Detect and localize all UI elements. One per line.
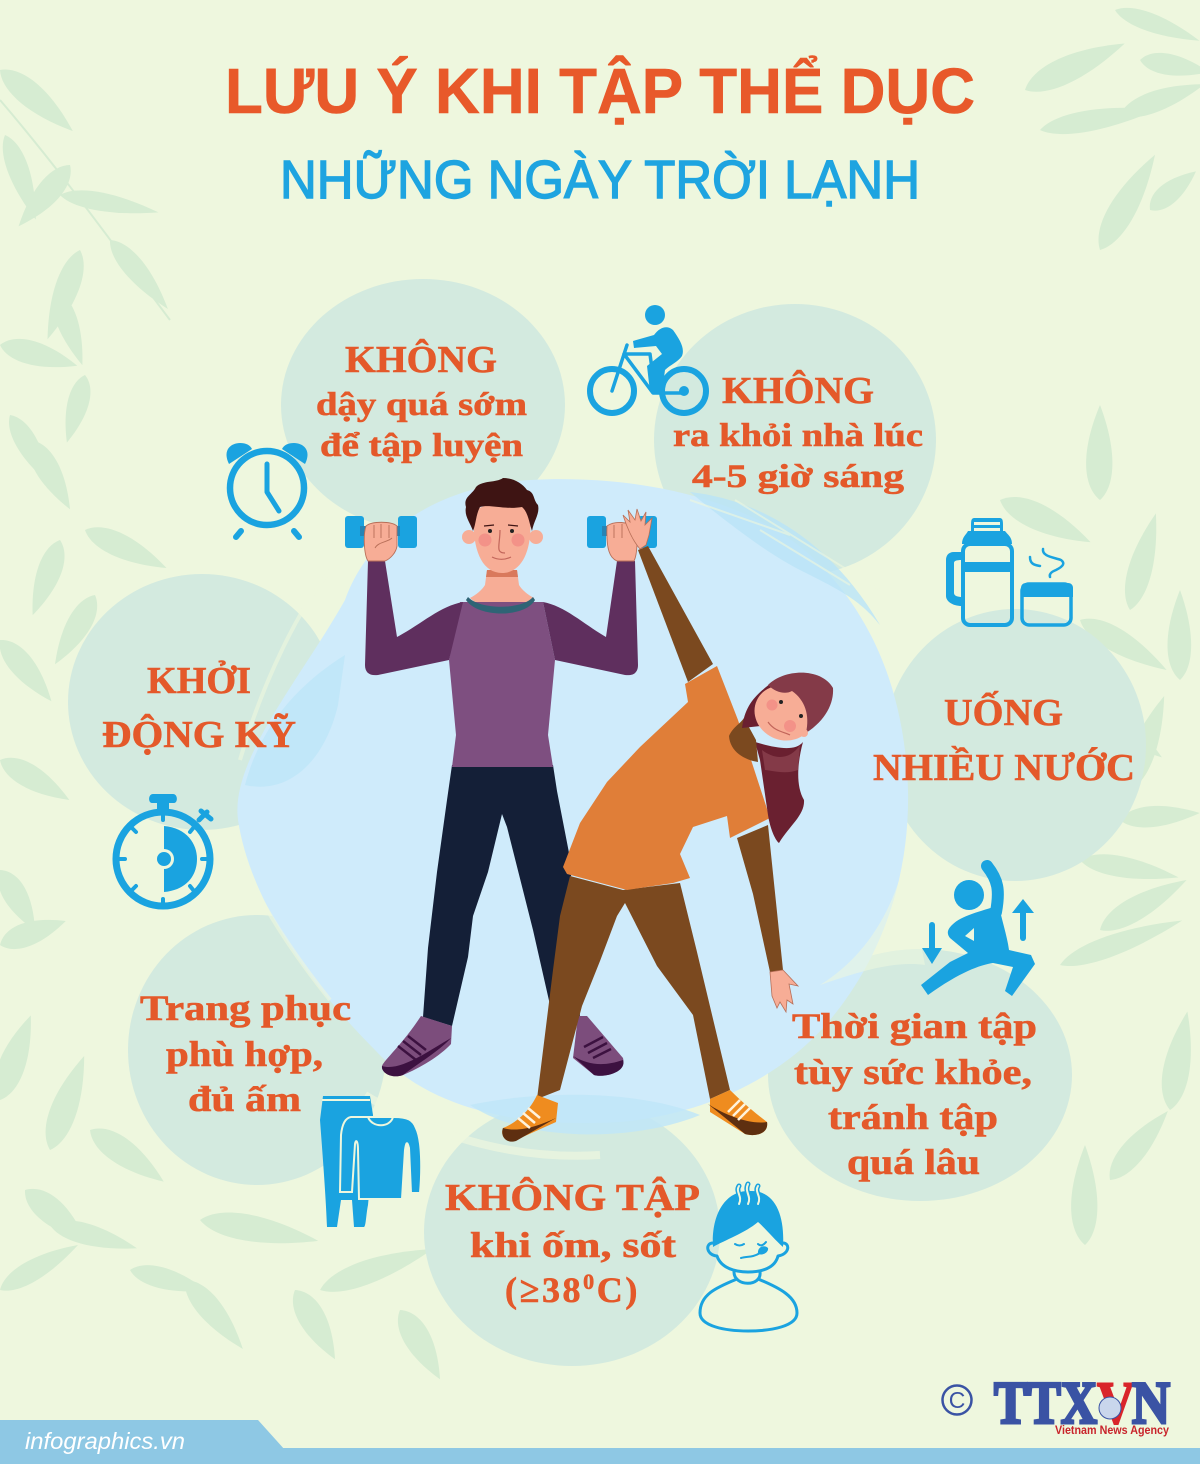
icon: alarm clock [226,443,308,537]
tip: do not exercise when sick [445,1176,700,1310]
icon: stretching person [921,866,1035,996]
woman's shoes [502,1090,767,1142]
logo: TTXVN [942,1370,1170,1437]
footer tab: website: infographics.vn [25,1428,185,1454]
dumbbells [345,516,657,548]
tip: do not leave home at 4-5 am [673,369,923,495]
decorative leaves: bottom left [0,1011,452,1385]
central blue circle [230,479,925,1156]
man's neck and head [462,478,543,608]
logo: TTXVN: TTX [994,1370,1097,1436]
tip: do not exercise when sick: C) [597,1270,640,1310]
tip: do not get up too early: KHÔNG [345,338,497,381]
subtitle: NHỮNG NGÀY TRỜI LẠNH [280,150,920,210]
tip: exercise time according to health: tránh tập [828,1097,998,1137]
tip: suitable warm clothes: Trang phục [140,988,351,1028]
tip: warm up thoroughly: ĐỘNG KỸ [102,713,296,756]
decorative leaves: top left [0,60,176,489]
tip: do not exercise when sick: KHÔNG TẬP [445,1176,700,1219]
decorative leaves: left middle [0,434,172,955]
tip: suitable warm clothes: phù hợp, [166,1034,323,1074]
icon: thermal clothing [320,1096,421,1227]
logo: TTXVN: C [949,1387,965,1413]
tip: do not exercise when sick: (≥38 [505,1270,583,1310]
logo: TTXVN: Vietnam News Agency [1055,1425,1170,1437]
tip: exercise time according to health: Thời gian tập [792,1006,1037,1046]
decorative leaves: right side [995,405,1200,1245]
tip: do not leave home at 4-5 am: KHÔNG [722,369,874,412]
icon: cyclist [590,305,706,413]
background blobs [68,279,1146,1366]
tip: exercise time according to health: quá lâu [847,1142,980,1182]
tip: exercise time according to health: tùy sức khỏe, [794,1052,1032,1092]
tip: suitable warm clothes: đủ ấm [188,1079,301,1119]
man's shirt [365,561,638,767]
tip: suitable warm clothes [140,988,351,1119]
tip: drink plenty of water: UỐNG [944,690,1063,734]
icon: stopwatch [116,794,211,906]
tip: warm up thoroughly: KHỞI [147,660,251,702]
logo: TTXVN: V [1097,1370,1135,1436]
logo: TTXVN: N [1132,1370,1170,1436]
woman's raised arm and hand [623,509,713,682]
decorative leaves: top right [1019,1,1200,256]
woman's hair, scarf and face [729,673,833,843]
man's trousers [423,765,580,1026]
tip: do not exercise when sick: 0 [583,1269,597,1294]
man's shoes [382,1016,623,1076]
man's hands [364,522,637,561]
title: LƯU Ý KHI TẬP THỂ DỤC [225,54,975,127]
woman's lower arm and hand [737,825,798,1012]
tip: warm up thoroughly [102,660,296,756]
icon: sick person [700,1184,797,1331]
woman's trousers [537,876,730,1099]
figure: man with dumbbells [345,478,657,1076]
tip: do not exercise when sick: khi ốm, sốt [470,1225,676,1265]
tip: drink plenty of water: NHIỀU NƯỚC [873,746,1135,789]
tip: do not get up too early: để tập luyện [320,428,523,464]
tip: do not get up too early: dậy quá sớm [316,387,527,423]
footer tab: website [0,1420,1200,1464]
tip: exercise time according to health [792,1006,1037,1182]
icon: thermos and cup [946,518,1073,625]
tip: do not leave home at 4-5 am: ra khỏi nhà lúc [673,418,923,454]
figure: woman stretching [502,509,833,1142]
tip: drink plenty of water [873,690,1135,789]
woman's orange shirt [563,666,770,890]
tip: do not get up too early [316,338,527,464]
tip: do not leave home at 4-5 am: 4-5 giờ sáng [692,459,905,495]
